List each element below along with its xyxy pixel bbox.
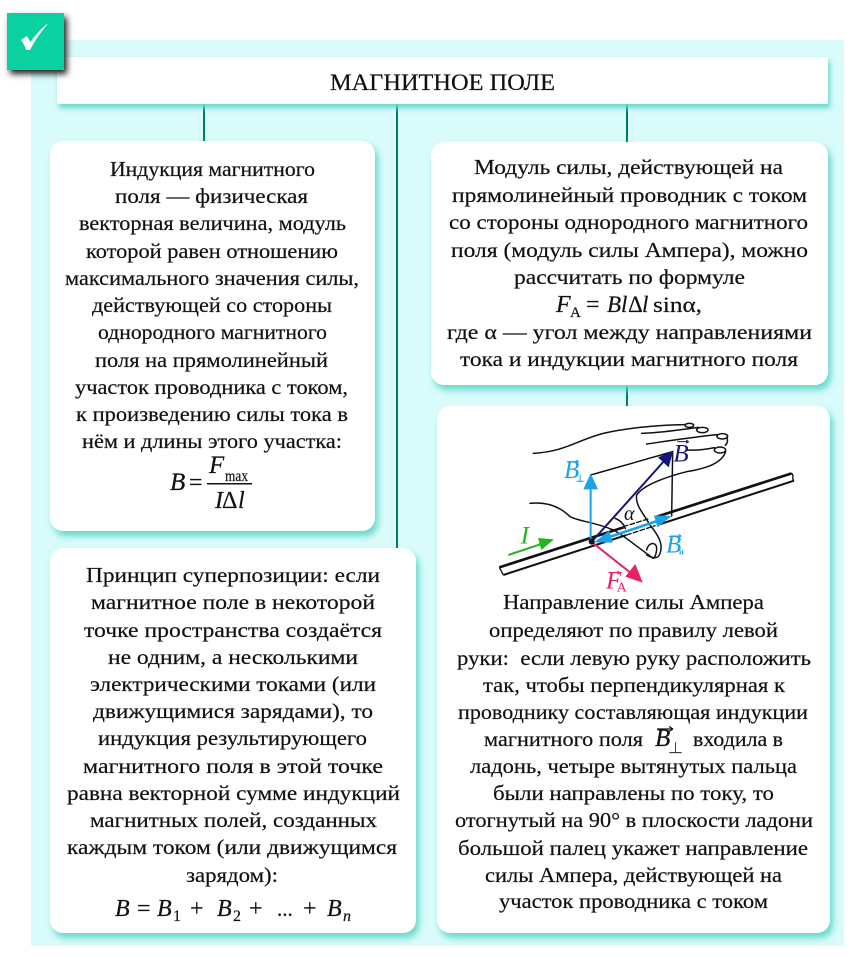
text: superposition principle <box>67 563 400 887</box>
vector: current <box>508 538 554 555</box>
text: superposition principle: каждым током (или движущимся <box>67 835 397 859</box>
formula: Ampere force: Bl <box>607 292 627 317</box>
text: induction definition: действующей со стороны <box>92 293 332 317</box>
vector labels: B <box>564 457 579 484</box>
formula: superposition <box>115 896 351 925</box>
title: МАГНИТНОЕ ПОЛЕ <box>330 70 555 95</box>
text: Ampere force description: тока и индукции магнитного поля <box>460 347 798 371</box>
formula: induction: l <box>238 488 245 514</box>
formula: superposition: + <box>303 896 317 922</box>
formula: superposition: B <box>327 896 342 922</box>
formula: induction: F <box>208 452 225 479</box>
text: Ampere force description: поля (модуль силы Ампера), можно <box>451 238 808 262</box>
text: Ampere force description: прямолинейный проводник с током <box>452 183 807 207</box>
text: left hand rule: ладонь, четыре вытянутых пальца <box>470 754 798 778</box>
formula: superposition: 1 <box>173 908 181 925</box>
text: superposition principle: Принцип суперпозиции: если <box>86 563 380 587</box>
text: left hand rule: участок проводника с током <box>499 889 768 913</box>
text: superposition principle: зарядом): <box>186 863 278 887</box>
text: superposition principle: магнитное поле в некоторой <box>91 590 375 614</box>
vector: B parallel <box>594 515 672 543</box>
text: left hand rule: ⊥ <box>668 741 683 757</box>
text: superposition principle: магнитных полей, созданных <box>90 808 378 832</box>
formula: Ampere force: l <box>642 292 648 317</box>
formula: superposition: 2 <box>233 908 241 925</box>
formula: induction <box>170 452 252 514</box>
text: Ampere force description: со стороны однородного магнитного <box>449 210 808 234</box>
formula: induction: = <box>189 470 203 496</box>
formula: superposition: + <box>249 896 263 922</box>
formula: Ampere force: A <box>570 305 581 321</box>
formula: Ampere force: sinα, <box>653 292 702 317</box>
text: left hand rule: Направление силы Ампера <box>503 590 765 614</box>
vector labels <box>520 440 689 595</box>
formula: superposition: + <box>190 896 204 922</box>
diagram: hand, conductor and vectors <box>498 422 794 595</box>
vector labels: B <box>673 440 689 467</box>
vector labels: ⊥ <box>576 474 584 484</box>
vector labels: I <box>520 522 531 549</box>
text: induction definition: поля — физическая <box>115 184 308 208</box>
title bar <box>57 57 828 104</box>
text: left hand rule: магнитного поля <box>484 727 643 751</box>
text: left hand rule: так, чтобы перпендикулярная к <box>483 673 786 697</box>
text: left hand rule: отогнутый на 90° в плоскости ладони <box>455 808 813 832</box>
text: Ampere force description <box>447 155 812 371</box>
vector labels: ıı <box>679 547 684 557</box>
formula: Ampere force: Δ <box>628 292 643 317</box>
formula: induction: B <box>170 469 185 496</box>
text: superposition principle: не одним, а несколькими <box>108 645 358 669</box>
formula: Ampere force: = <box>586 292 600 318</box>
text: left hand rule: B <box>655 725 670 752</box>
formula: Ampere force <box>555 292 702 321</box>
connector: title to superposition panel <box>396 104 398 548</box>
text: left hand rule: руки: если левую руку расположить <box>457 646 811 670</box>
text: induction definition: нём и длины этого участка: <box>82 429 342 453</box>
text: left hand rule: входила в <box>693 727 783 751</box>
vector: force <box>593 543 643 583</box>
text: superposition principle: электрическими токами (или <box>90 672 376 696</box>
text: induction definition <box>65 157 359 453</box>
panel: left hand rule <box>437 406 830 933</box>
text: Ampere force description: рассчитать по формуле <box>514 265 745 289</box>
formula: superposition: B <box>157 896 172 922</box>
formula: superposition: B <box>217 896 232 922</box>
vector labels: F <box>605 567 622 594</box>
formula: superposition: B <box>115 896 130 922</box>
vector: B <box>593 451 673 541</box>
text: Ampere force description: где α — угол между направлениями <box>447 320 812 344</box>
connector: Ampere force panel to left hand rule panel <box>626 385 628 407</box>
text: left hand rule: были направлены по току, то <box>493 781 774 805</box>
text: induction definition: векторная величина, модуль <box>79 211 346 235</box>
formula: superposition: ... <box>277 897 293 921</box>
text: induction definition: максимального значения силы, <box>65 266 359 290</box>
text: induction definition: однородного магнитного <box>98 320 327 344</box>
panel: Ampere force <box>431 142 828 385</box>
formula: superposition: = <box>137 896 151 922</box>
text: left hand rule <box>455 590 813 913</box>
text: induction definition: которой равен отношению <box>86 239 338 263</box>
icon: check mark badge <box>7 13 64 70</box>
text: superposition principle: магнитного поля в этой точке <box>83 754 383 778</box>
text: induction definition: к произведению силы тока в <box>76 402 348 426</box>
vector labels: α <box>624 503 635 525</box>
vector: B perpendicular <box>583 473 598 541</box>
text: induction definition: участок проводника с током, <box>75 375 348 399</box>
text: induction definition: поля на прямолинейный <box>95 348 328 372</box>
text: superposition principle: точке пространства создаётся <box>84 618 382 642</box>
formula: superposition: n <box>343 908 351 925</box>
connector: title to induction panel <box>203 104 205 141</box>
panel: superposition principle <box>50 548 416 933</box>
formula: induction: I <box>214 488 224 514</box>
formula: Ampere force: F <box>555 292 571 318</box>
formula: induction: max <box>225 468 248 485</box>
text: left hand rule: проводнику составляющая индукции <box>458 700 808 724</box>
hand outline <box>530 423 728 558</box>
wire <box>499 473 794 575</box>
text: left hand rule: определяют по правилу левой <box>489 618 778 642</box>
text: left hand rule: силы Ампера, действующей на <box>485 863 783 887</box>
text: superposition principle: индукция результирующего <box>98 726 367 750</box>
vector labels: A <box>617 580 628 595</box>
text: superposition principle: равна векторной сумме индукций <box>67 781 400 805</box>
conductor dot <box>589 539 595 545</box>
text: left hand rule: большой палец укажет направление <box>458 836 808 860</box>
formula: induction: Δ <box>222 488 237 514</box>
panel: magnetic induction <box>50 141 375 531</box>
text: induction definition: Индукция магнитного <box>110 157 315 181</box>
vector labels: B <box>666 532 681 559</box>
connector: title to Ampere force panel <box>626 104 628 142</box>
text: superposition principle: движущимися зарядами), то <box>93 699 373 723</box>
text: Ampere force description: Модуль силы, действующей на <box>474 155 784 179</box>
